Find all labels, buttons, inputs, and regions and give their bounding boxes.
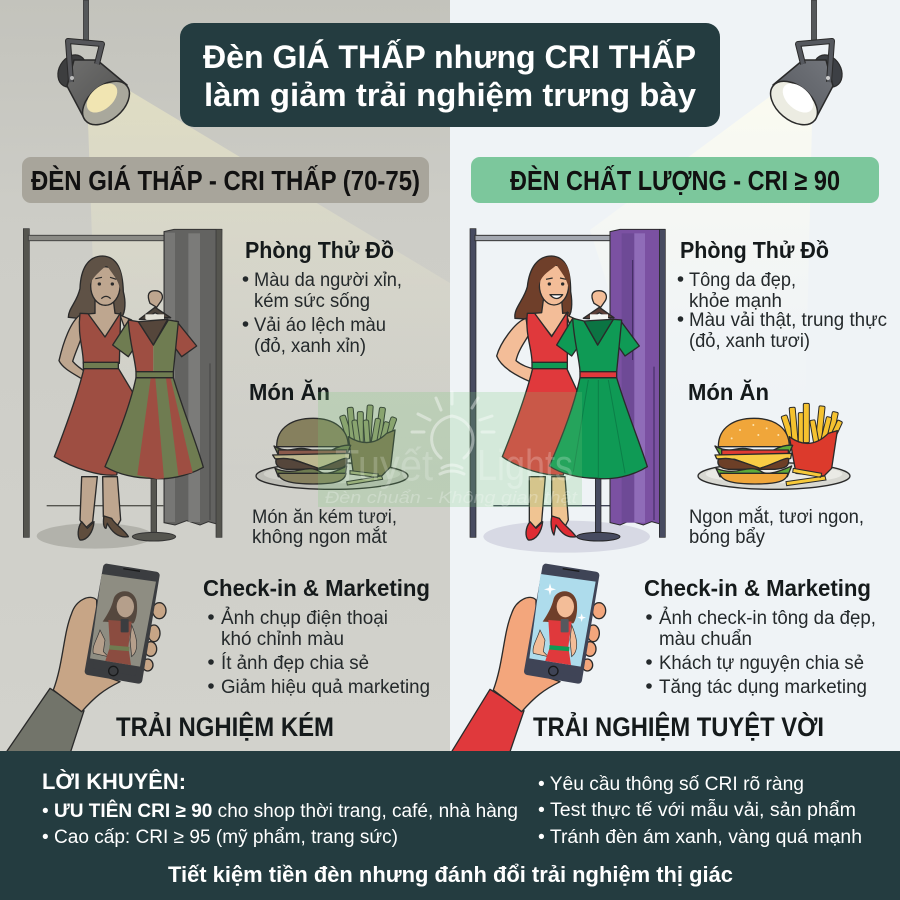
advice right column: • Test thực tế với mẫu vải, sản phẩm xyxy=(538,799,856,821)
text: fitting room high CRI xyxy=(678,237,887,352)
text: check-in high CRI: Check-in & Marketing xyxy=(644,575,871,601)
verdict: poor experience: TRẢI NGHIỆM KÉM xyxy=(116,710,334,742)
text: check-in high CRI: Tăng tác dụng marketing xyxy=(659,677,867,698)
text: check-in low CRI: Ảnh chụp điện thoại xyxy=(221,607,388,629)
advice right column: • Yêu cầu thông số CRI rõ ràng xyxy=(538,774,804,795)
heading: food low CRI: Món Ăn xyxy=(249,378,330,405)
panel: advice xyxy=(0,751,900,900)
advice left column: • Cao cấp: CRI ≥ 95 (mỹ phẩm, trang sức) xyxy=(42,827,398,848)
text: food high CRI: bóng bẩy xyxy=(689,527,765,548)
text: check-in low CRI: Check-in & Marketing xyxy=(203,575,430,601)
text: fitting room high CRI: khỏe mạnh xyxy=(689,291,782,312)
advice right column xyxy=(538,774,862,848)
advice left column: • ƯU TIÊN CRI ≥ 90 cho shop thời trang, café, nhà hàng xyxy=(42,800,518,822)
text: check-in high CRI: màu chuẩn xyxy=(659,629,752,650)
heading: low CRI: ĐÈN GIÁ THẤP - CRI THẤP (70-75) xyxy=(31,165,420,196)
illustration: fitting room high CRI xyxy=(470,229,665,553)
text: food high CRI: Ngon mắt, tươi ngon, xyxy=(689,506,864,528)
heading: food high CRI: Món Ăn xyxy=(688,378,769,405)
icon: hand holding phone low CRI xyxy=(7,567,166,752)
text: fitting room low CRI: Phòng Thử Đồ xyxy=(245,237,394,263)
watermark: Lights xyxy=(477,441,573,490)
watermark: Tuyết xyxy=(335,441,433,490)
text: check-in high CRI: Ảnh check-in tông da đẹp, xyxy=(659,607,876,629)
watermark xyxy=(318,392,582,507)
illustration: fitting room low CRI xyxy=(23,229,222,549)
text: check-in low CRI: Giảm hiệu quả marketing xyxy=(221,677,430,698)
text: food low CRI: không ngon mắt xyxy=(252,526,388,548)
icon: spotlight right xyxy=(762,0,848,133)
text: fitting room high CRI: Phòng Thử Đồ xyxy=(680,237,829,263)
text: fitting room low CRI xyxy=(243,237,402,357)
conclusion: Tiết kiệm tiền đèn nhưng đánh đổi trải nghiệm thị giác xyxy=(168,862,733,887)
panel: high CRI background xyxy=(450,0,900,760)
icon: hand holding phone high CRI xyxy=(452,567,606,752)
watermark: Đèn chuẩn - Không gian thật xyxy=(325,488,578,507)
icon: fresh burger and fries xyxy=(698,403,850,489)
advice left column xyxy=(42,800,518,848)
text: fitting room high CRI: Tông da đẹp, xyxy=(689,270,796,291)
title: làm giảm trải nghiệm trưng bày xyxy=(204,77,696,113)
title xyxy=(180,23,720,127)
text: food high CRI xyxy=(689,506,864,548)
text: fitting room high CRI: (đỏ, xanh tươi) xyxy=(689,331,810,352)
text: fitting room low CRI: kém sức sống xyxy=(254,291,370,312)
panel: low CRI background xyxy=(0,0,450,760)
text: fitting room low CRI: (đỏ, xanh xỉn) xyxy=(254,336,366,357)
text: fitting room low CRI: Màu da người xỉn, xyxy=(254,270,402,291)
text: check-in low CRI: khó chỉnh màu xyxy=(221,629,344,650)
text: food low CRI xyxy=(252,507,397,548)
text: check-in low CRI: Ít ảnh đẹp chia sẻ xyxy=(221,653,369,674)
advice right column: • Tránh đèn ám xanh, vàng quá mạnh xyxy=(538,827,862,848)
heading: high CRI xyxy=(471,157,879,203)
text: check-in high CRI xyxy=(644,575,876,698)
text: food low CRI: Món ăn kém tươi, xyxy=(252,507,397,528)
icon: spotlight left xyxy=(52,0,138,133)
text: check-in high CRI: Khách tự nguyện chia sẻ xyxy=(659,653,864,674)
heading: low CRI xyxy=(22,157,429,203)
verdict: great experience: TRẢI NGHIỆM TUYỆT VỜI xyxy=(533,710,824,742)
title: Đèn GIÁ THẤP nhưng CRI THẤP xyxy=(203,39,696,75)
heading: high CRI: ĐÈN CHẤT LƯỢNG - CRI ≥ 90 xyxy=(510,165,840,196)
text: fitting room low CRI: Vải áo lệch màu xyxy=(254,315,386,336)
icon: dull burger and fries xyxy=(256,405,408,489)
text: fitting room high CRI: Màu vải thật, trung thực xyxy=(689,310,887,331)
advice heading: LỜI KHUYÊN: xyxy=(42,769,186,794)
light beam right xyxy=(590,95,812,420)
light beam left xyxy=(88,88,450,470)
text: check-in low CRI xyxy=(203,575,430,698)
